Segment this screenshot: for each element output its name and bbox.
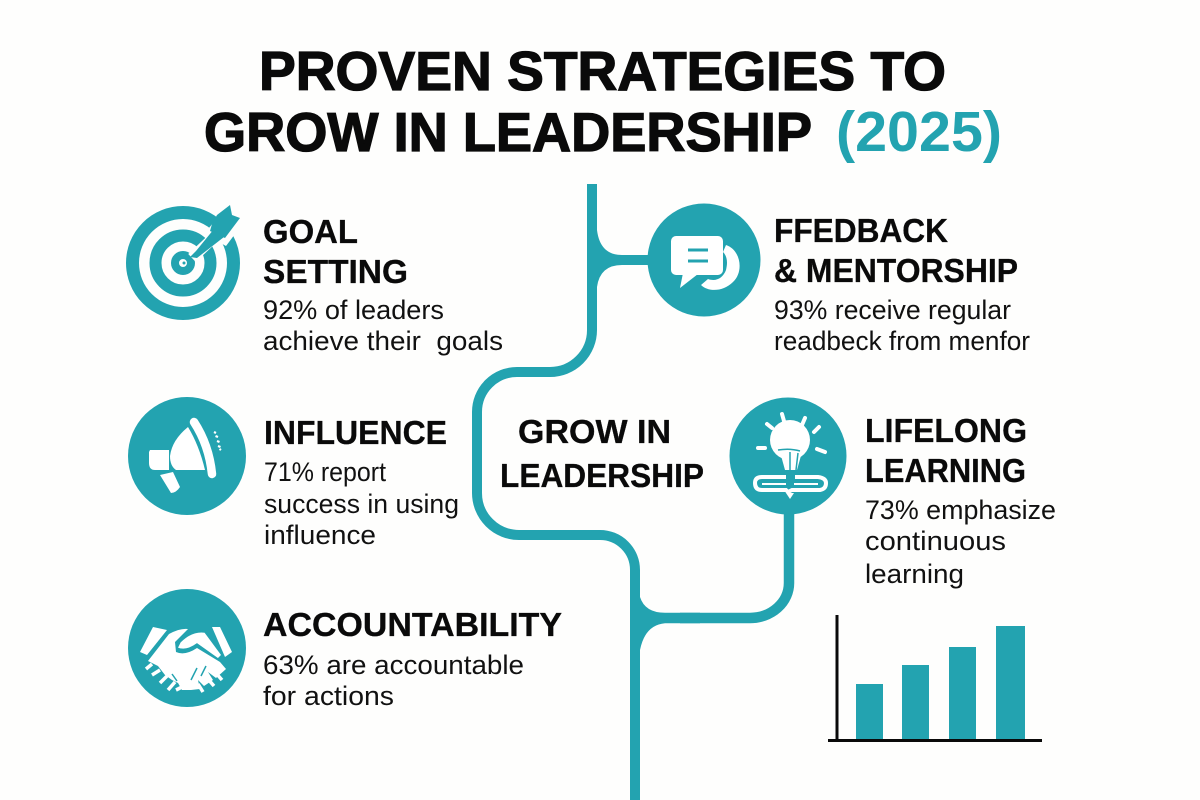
center label: LEADERSHIP (500, 457, 704, 494)
heading: feedback and mentorship: FFEDBACK (774, 212, 948, 249)
icon: light bulb on open book (730, 398, 846, 514)
heading: feedback and mentorship: & MENTORSHIP (774, 252, 1018, 289)
text: feedback stat: readbeck from menfor (774, 326, 1030, 356)
icon: handshake (128, 589, 246, 707)
text: goal setting stat: 92% of leaders (263, 295, 444, 325)
icon: chat bubble and handset (648, 204, 760, 316)
text: lifelong learning stat (865, 495, 1056, 589)
text: lifelong learning stat: continuous (865, 526, 1006, 556)
text: feedback stat (774, 295, 1030, 356)
text: influence stat: success in using (264, 489, 459, 519)
central timeline path (477, 184, 789, 800)
icon: target with dart (132, 200, 244, 314)
text: influence stat: 71% report (264, 457, 386, 487)
text: influence stat: influence (264, 520, 376, 550)
text: lifelong learning stat: learning (865, 559, 964, 589)
title: (2025) (836, 100, 1002, 164)
text: accountability stat: for actions (263, 681, 394, 711)
heading: lifelong learning: LIFELONG (865, 412, 1027, 449)
icon: megaphone (128, 397, 246, 515)
text: accountability stat (263, 650, 524, 711)
heading: lifelong learning (865, 412, 1027, 489)
heading: feedback and mentorship (774, 212, 1018, 289)
title: PROVEN STRATEGIES TO (259, 40, 946, 102)
heading: goal setting: SETTING (263, 253, 408, 290)
bar chart (828, 615, 1042, 742)
heading: accountability: ACCOUNTABILITY (263, 606, 562, 643)
heading: goal setting (263, 213, 408, 290)
panel: goal setting (132, 200, 503, 356)
text: influence stat (264, 457, 459, 550)
title (204, 40, 1002, 164)
text: lifelong learning stat: 73% emphasize (865, 495, 1056, 525)
text: goal setting stat: achieve their goals (263, 326, 503, 356)
panel: lifelong learning (730, 398, 1056, 589)
title: GROW IN LEADERSHIP (204, 101, 812, 163)
text: accountability stat: 63% are accountable (263, 650, 524, 680)
text: goal setting stat (263, 295, 503, 356)
panel: influence (128, 397, 459, 550)
panel: accountability (128, 589, 562, 711)
heading: lifelong learning: LEARNING (865, 452, 1026, 489)
panel: feedback and mentorship (648, 204, 1030, 356)
heading: influence: INFLUENCE (264, 414, 447, 451)
center label (500, 413, 704, 494)
heading: goal setting: GOAL (263, 213, 358, 250)
center label: GROW IN (518, 413, 671, 450)
text: feedback stat: 93% receive regular (774, 295, 1011, 325)
